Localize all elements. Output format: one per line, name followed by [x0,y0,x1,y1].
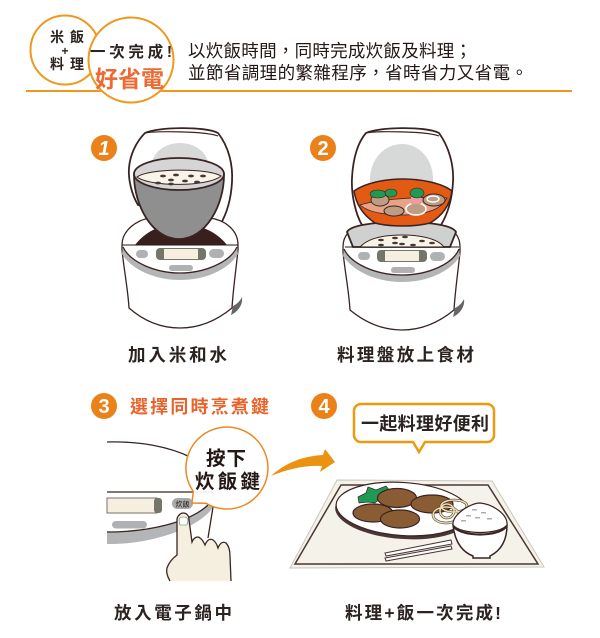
badge: step 1 [91,135,117,161]
badge: power saving [88,18,174,102]
callout: press rice key: 炊飯鍵 [195,470,260,493]
control panel [343,249,460,282]
badge: rice plus dishes: 米飯 [50,29,84,45]
header rule [26,90,572,92]
cooker lid [352,128,453,225]
speech bubble [354,404,494,452]
heading: step 3: 選擇同時烹煮鍵 [130,396,269,417]
callout: press rice key [186,427,268,509]
label: step 3: 放入電子鍋中 [114,603,232,623]
badge: power saving: 一次完成! [90,42,172,61]
speech bubble: 一起料理好便利 [361,414,489,434]
illustration: pressing the rice button [107,427,268,581]
label: step 4: 料理+飯一次完成! [345,603,501,623]
garnish [358,486,390,503]
chopsticks [385,540,452,561]
illustration: finished meal [290,478,544,568]
orange dish with food [354,179,452,226]
badge: step 2 [310,135,336,161]
cooker lid [129,128,232,225]
placemat [290,480,544,568]
label: step 1: 加入米和水 [128,345,228,365]
inner pot [347,222,456,247]
label: step 2: 料理盤放上食材 [337,345,474,365]
meat patties [353,488,453,528]
plate [333,478,473,544]
intro text: 並節省調理的繁雜程序，省時省力又省電。 [188,63,528,83]
callout: press rice key: 按下 [206,447,246,470]
cooker body [343,226,460,330]
rice button [172,498,193,509]
badge: rice plus dishes: 料理 [50,56,84,72]
intro text: 以炊飯時間，同時完成炊飯及料理； [188,41,472,61]
intro text [188,41,528,83]
badge: step 3 [91,393,117,419]
cooker body [122,218,238,328]
hand [167,513,231,581]
badge: step 4 [311,393,337,419]
badge: step 2: 2 [317,138,329,160]
arrow [271,449,335,476]
inner pot with rice [134,175,224,239]
rice button: 炊飯 [176,500,190,508]
badge: rice plus dishes: + [61,44,69,58]
badge: step 3: 3 [98,396,110,418]
badge: rice plus dishes [30,16,100,84]
onion rings [433,500,467,523]
badge: power saving: 好省電 [95,66,164,92]
panel: step 1 cooker [91,128,242,328]
badge: step 1: 1 [98,138,110,160]
panel: step 2 cooker [310,128,464,330]
rice bowl [453,503,507,558]
badge: step 4: 4 [318,396,330,418]
